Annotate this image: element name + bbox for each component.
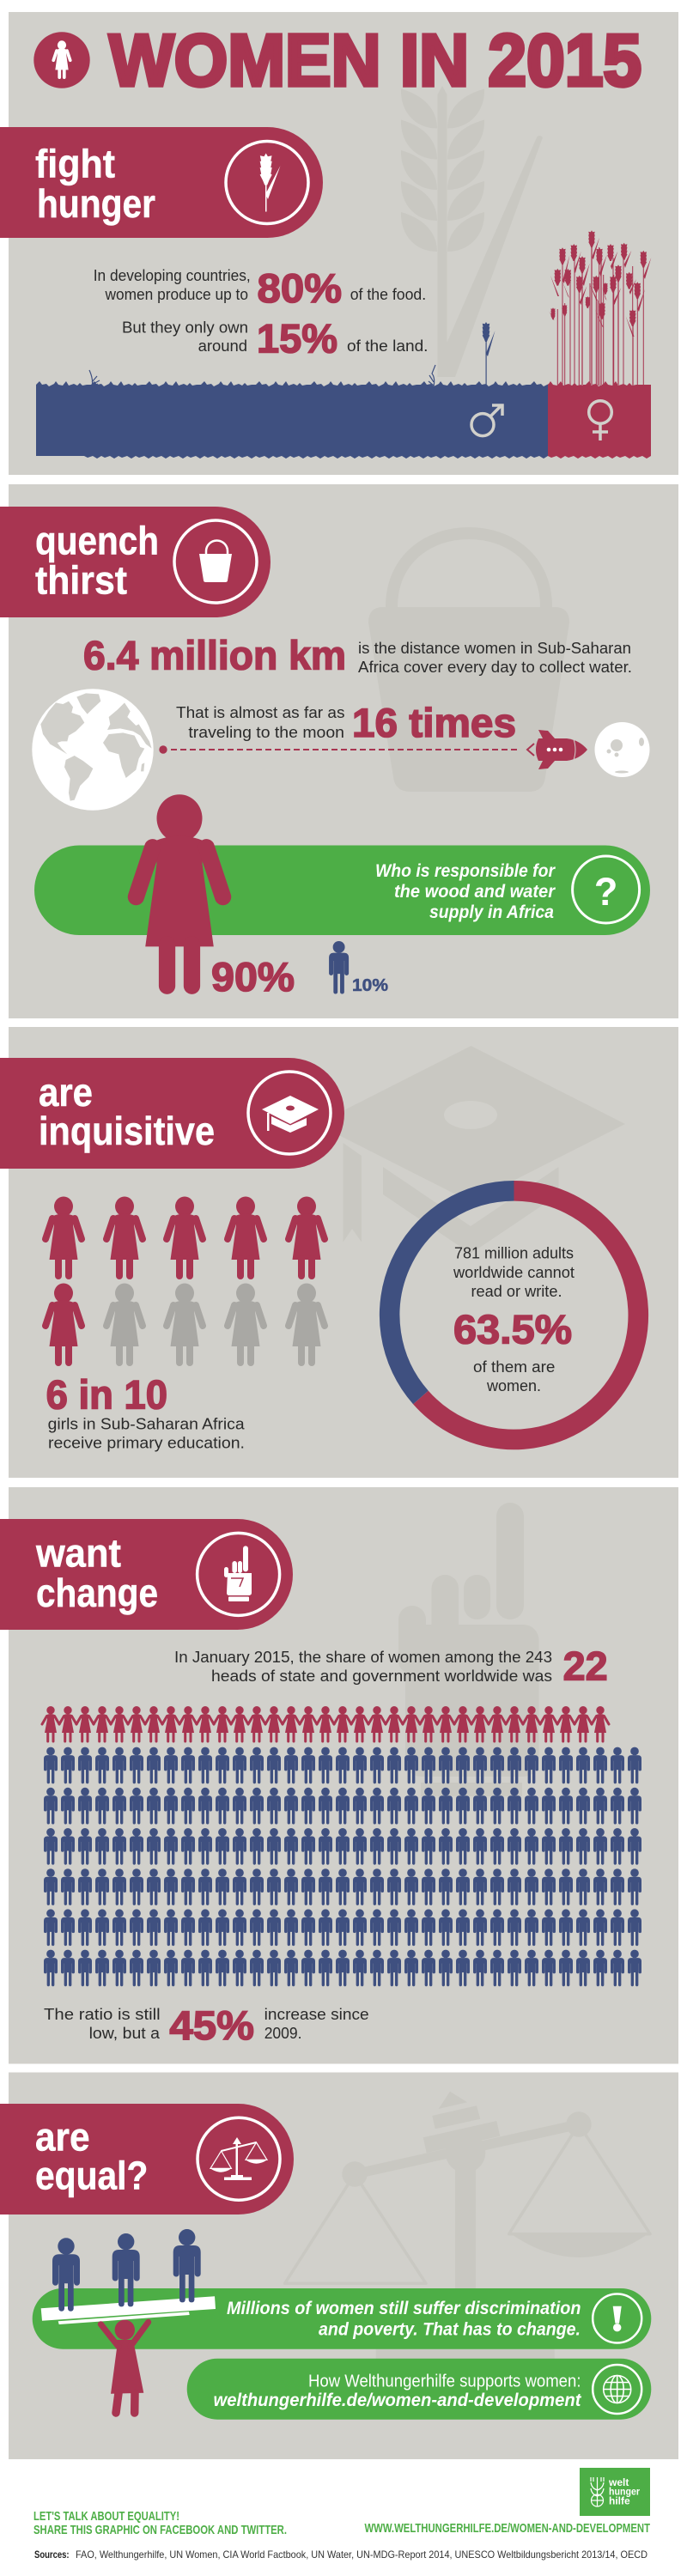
logo: welthungerhilfe — [580, 2468, 650, 2516]
label: 90%: 90% — [211, 954, 295, 999]
ribbon: are inquisitive: inquisitive — [39, 1109, 215, 1153]
ribbon: fight hunger: hunger — [37, 181, 155, 226]
text: 6 in 10: girls in Sub-Saharan Africa — [48, 1415, 246, 1432]
icon: red wheat field — [549, 230, 651, 386]
icon: bucket — [199, 541, 232, 582]
icon: wheat — [260, 153, 280, 211]
text: donut centre: women. — [486, 1377, 541, 1394]
text: women produce 80% of the food: 80% — [258, 265, 342, 311]
callout: how welthungerhilfe supports women — [187, 2359, 651, 2420]
icon: raised finger — [224, 1546, 252, 1601]
text: heads of state: In January 2015, the share of women among the 243 — [174, 1649, 552, 1666]
footer: share call: SHARE THIS GRAPHIC ON FACEBOOK AND TWITTER. — [33, 2523, 287, 2537]
icon: small man — [329, 941, 349, 994]
title: WOMEN IN 2015 — [109, 21, 641, 101]
text: donut centre: 63.5% — [453, 1307, 572, 1352]
text: women produce 80% of the food: women produce up to — [105, 286, 248, 303]
chart: land ownership bar — [36, 378, 651, 464]
footer: share call: LET'S TALK ABOUT EQUALITY! — [33, 2509, 179, 2524]
footer: sources: FAO, Welthungerhilfe, UN Women, CIA World Factbook, UN Water, UN-MDG-Report 2014, UNESCO Weltbildungsbericht 2013/14, OECD — [76, 2549, 647, 2561]
logo: welthungerhilfe: hilfe — [609, 2495, 630, 2507]
callout: who is responsible: Who is responsible for — [375, 861, 556, 881]
callout: who is responsible: ? — [594, 870, 617, 914]
text: women produce 80% of the food: In developing countries, — [94, 267, 251, 284]
text: women own 15% of the land: But they only own — [122, 319, 248, 337]
text: heads of state: heads of state and government worldwide was — [211, 1668, 552, 1685]
callout: millions of women — [33, 2288, 651, 2349]
icon: scales — [210, 2137, 267, 2180]
text: 16 times: traveling to the moon — [188, 724, 344, 741]
ribbon: want change: want — [35, 1531, 121, 1576]
ribbon: quench thirst: thirst — [35, 557, 127, 602]
icon: globe — [32, 689, 154, 811]
text: 6.4 million km: is the distance women in Sub-Saharan — [358, 640, 631, 657]
text: heads of state — [174, 1643, 608, 1689]
text: donut centre: worldwide cannot — [453, 1264, 575, 1281]
panel: are equal — [0, 2073, 678, 2459]
callout: how welthungerhilfe supports women: welthungerhilfe.de/women-and-development — [213, 2391, 581, 2410]
callout: millions of women: and poverty. That has to change. — [319, 2319, 581, 2339]
callout: who is responsible: supply in Africa — [429, 902, 554, 922]
text: donut centre: of them are — [473, 1358, 555, 1376]
text: women own 15% of the land: 15% — [257, 316, 337, 361]
text: 45% increase: The ratio is still — [44, 2006, 161, 2023]
chart: illiteracy donut — [390, 1191, 638, 1439]
text: women produce 80% of the food — [94, 265, 426, 311]
text: 6 in 10: 6 in 10 — [46, 1371, 167, 1417]
callout: how welthungerhilfe supports women: How Welthungerhilfe supports women: — [308, 2372, 581, 2391]
text: 45% increase: 2009. — [264, 2025, 302, 2042]
ribbon: fight hunger: fight — [35, 141, 115, 185]
title icon: woman — [33, 32, 90, 88]
icon: big woman — [136, 794, 223, 986]
text: women produce 80% of the food: of the food. — [350, 286, 426, 303]
ribbon: are inquisitive: are — [39, 1070, 93, 1115]
ribbon: quench thirst — [0, 507, 271, 617]
callout: who is responsible: the wood and water — [394, 882, 556, 902]
icon: graduation cap — [262, 1096, 319, 1133]
pictogram: men leaders — [44, 1747, 641, 1986]
icon: sparse blue wheat — [483, 322, 495, 386]
footer: share call — [33, 2509, 287, 2537]
panel: want change — [0, 1487, 678, 2064]
ribbon: are equal — [0, 2104, 294, 2215]
text: donut centre: read or write. — [471, 1283, 562, 1300]
text: women own 15% of the land: around — [198, 337, 247, 355]
text: 16 times — [176, 700, 516, 745]
icon: male symbol — [471, 405, 502, 436]
text: women own 15% of the land: of the land. — [347, 337, 428, 355]
icon: dead plants — [89, 365, 435, 386]
text: heads of state: 22 — [563, 1643, 608, 1689]
dashed route — [159, 745, 520, 754]
ribbon: fight hunger — [0, 127, 323, 238]
icon: three men on plank — [52, 2229, 201, 2312]
icon grid: 6 of 10 girls — [46, 1197, 325, 1363]
panel: fight hunger — [0, 12, 678, 475]
background bucket — [368, 533, 569, 792]
ribbon: want change — [0, 1519, 293, 1630]
text: 6.4 million km — [83, 633, 632, 678]
callout: who is responsible — [34, 845, 650, 935]
icon: rocket — [527, 730, 587, 769]
background hand — [398, 1503, 539, 1796]
text: 16 times: That is almost as far as — [176, 704, 345, 721]
text: 45% increase: 45% — [169, 2002, 254, 2048]
ribbon: are equal: equal? — [35, 2154, 148, 2198]
callout: millions of women: Millions of women still suffer discrimination — [227, 2299, 581, 2318]
background graduation cap — [317, 1046, 625, 1254]
icon: logo wheat globe — [591, 2477, 604, 2506]
text: 6 in 10 — [46, 1371, 246, 1452]
text: 16 times: 16 times — [352, 700, 516, 745]
text: donut centre: 781 million adults — [454, 1245, 574, 1262]
text: 6.4 million km: 6.4 million km — [83, 633, 346, 678]
ribbon: want change: change — [36, 1571, 158, 1615]
icon: woman holding plank — [100, 2320, 149, 2413]
text: 45% increase: increase since — [264, 2006, 369, 2023]
background scales — [285, 2092, 650, 2361]
logo: welthungerhilfe: welt — [608, 2476, 629, 2488]
icon: moon — [594, 722, 649, 777]
panel: are inquisitive — [0, 1027, 678, 1478]
pictogram: women leaders — [42, 1706, 609, 1741]
footer: sources: Sources: — [34, 2549, 70, 2561]
text: 45% increase: low, but a — [89, 2025, 161, 2042]
ribbon: are equal: are — [35, 2114, 90, 2159]
plank — [41, 2296, 216, 2324]
text: donut centre — [453, 1245, 575, 1394]
text: women own 15% of the land — [122, 316, 428, 361]
text: 6.4 million km: Africa cover every day to collect water. — [358, 659, 632, 676]
panel: quench thirst — [0, 484, 678, 1018]
ribbon: are inquisitive — [0, 1058, 344, 1169]
icon: female symbol — [589, 401, 611, 440]
ribbon: quench thirst: quench — [35, 519, 159, 563]
icon: small globe — [604, 2375, 631, 2403]
text: 45% increase — [44, 2002, 369, 2048]
label: 10%: 10% — [352, 976, 388, 995]
logo: welthungerhilfe: hunger — [609, 2486, 640, 2498]
background wheat — [401, 86, 543, 377]
text: 6 in 10: receive primary education. — [48, 1435, 245, 1452]
